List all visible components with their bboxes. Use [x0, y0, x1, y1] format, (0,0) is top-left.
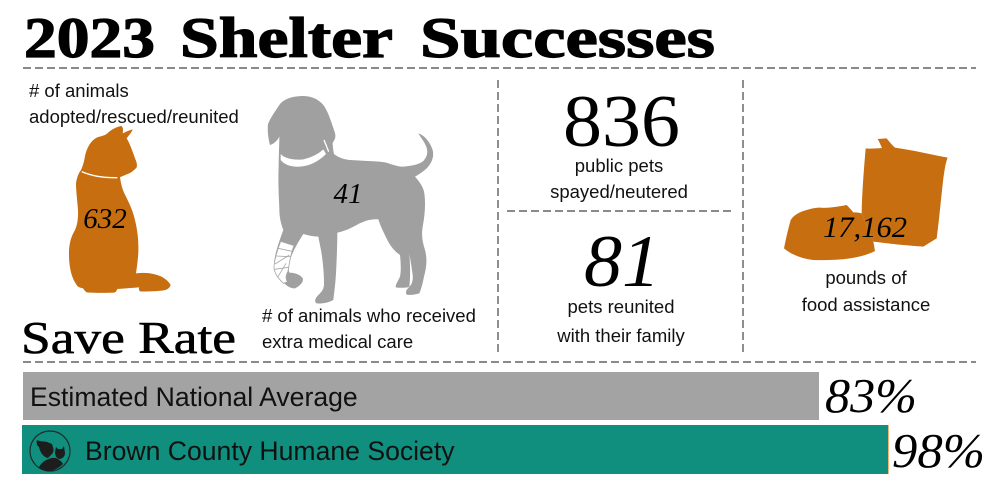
label: brown county humane society: Brown County Humane Society [85, 436, 455, 466]
label: spayed and neutered: spayed/neutered [550, 181, 688, 202]
bar: national average [23, 372, 819, 420]
panel: food assistance [784, 138, 948, 315]
icon: gray dog with bandaged leg [268, 96, 433, 304]
label: medical care: extra medical care [262, 331, 413, 352]
label: pets reunited: pets reunited [568, 296, 674, 317]
label: spayed and neutered: public pets [575, 155, 663, 176]
panel: medical care [262, 96, 476, 352]
label: food assistance: pounds of [825, 267, 907, 288]
icon: orange cat [69, 126, 171, 293]
value: 836: 836 [563, 81, 680, 163]
label: food assistance: food assistance [802, 294, 930, 315]
label: pets reunited: with their family [556, 325, 685, 346]
label: national average: Estimated National Average [30, 382, 358, 412]
value: 41: 41 [334, 178, 362, 210]
value: 632: 632 [83, 203, 127, 235]
value: 17,162: 17,162 [823, 211, 907, 244]
panel: spayed and neutered [550, 81, 688, 202]
value: 81: 81 [584, 221, 660, 303]
value: 83%: 83% [825, 368, 917, 423]
label: animals adopted: # of animals [29, 80, 129, 101]
panel: pets reunited [556, 221, 685, 346]
label: medical care: # of animals who received [262, 305, 476, 326]
panel: animals adopted [29, 80, 239, 293]
title: Successes [420, 7, 715, 70]
bar: brown county humane society [22, 425, 889, 474]
icon: pet logo [30, 431, 70, 471]
title: Shelter [180, 7, 393, 70]
icon: food bag and bowl [784, 138, 948, 260]
title [24, 7, 715, 70]
title: 2023 [24, 7, 155, 70]
value: 98%: 98% [892, 423, 985, 478]
label: animals adopted: adopted/rescued/reunited [29, 106, 239, 127]
heading: save rate: Save Rate [21, 313, 236, 363]
